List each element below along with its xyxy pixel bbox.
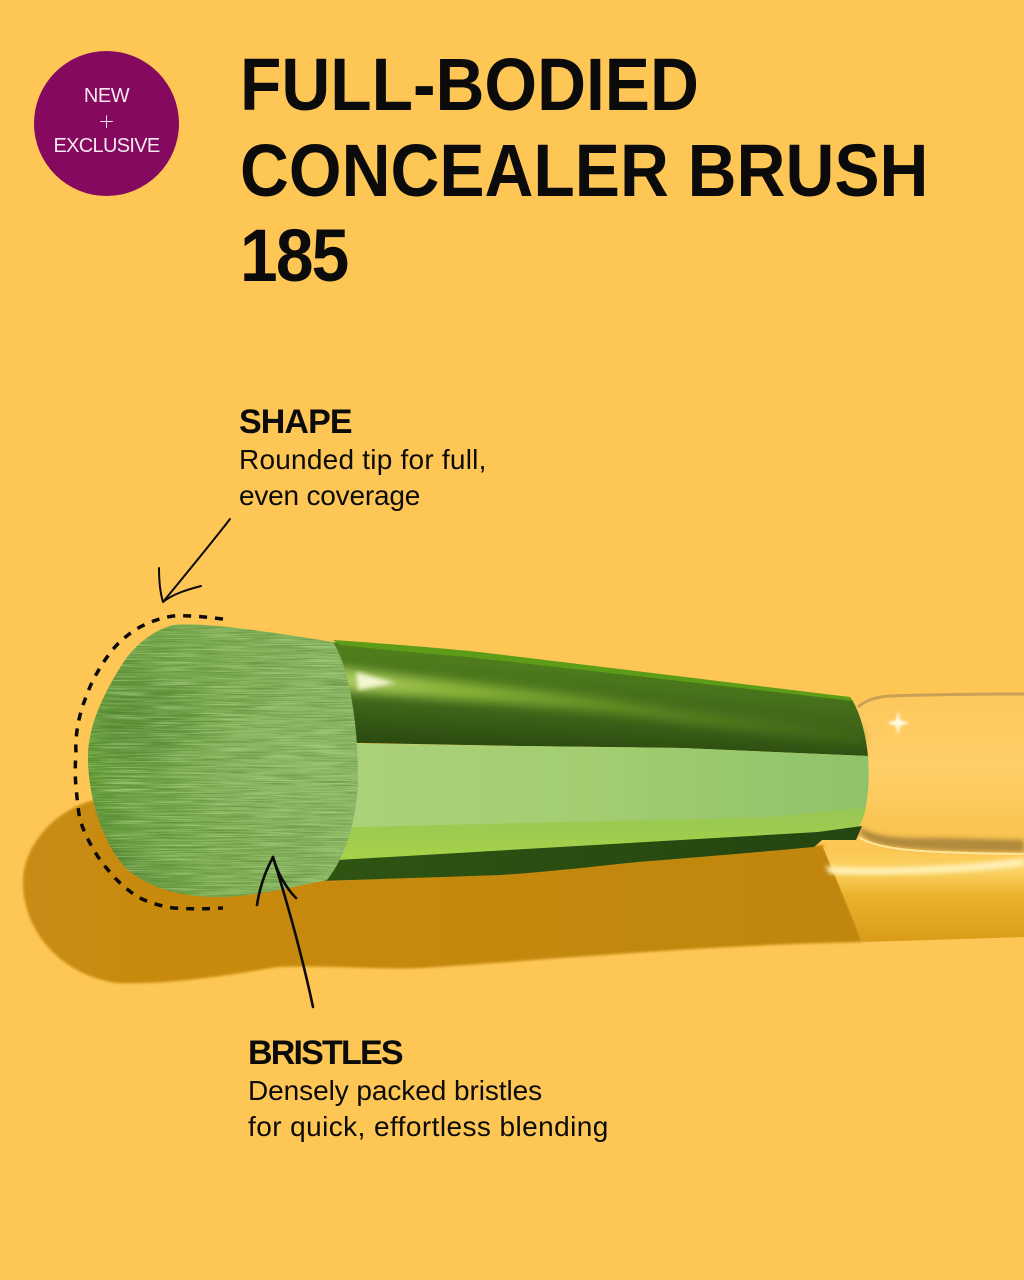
callout: shape: even coverage [239,480,420,511]
illustration: brush with shadow and callouts [22,518,1024,1008]
callout: bristles: for quick, effortless blending [248,1111,609,1142]
badge: new + exclusive: EXCLUSIVE [54,135,159,157]
badge: new + exclusive [34,51,179,196]
title: 185 [240,214,347,297]
badge: new + exclusive: NEW [84,85,129,107]
callout: shape: Rounded tip for full, [239,444,487,475]
arrow: shape [159,519,230,602]
brush shadow [23,800,863,983]
callout: shape [239,403,487,511]
arrow: bristles [257,857,313,1007]
title: FULL-BODIED [240,43,699,126]
title: CONCEALER BRUSH [240,128,928,212]
acrylic handle shadow [823,847,1024,942]
bristles [88,624,358,897]
callout: bristles: BRISTLES [248,1034,402,1072]
callout: shape: SHAPE [239,403,352,441]
dashed outline: shape [75,616,223,909]
metal ferrule [320,640,869,881]
callout: bristles: Densely packed bristles [248,1075,542,1106]
acrylic handle [855,694,1024,854]
callout: bristles [248,1034,609,1142]
badge: new + exclusive: + [98,106,115,137]
title [240,43,928,297]
